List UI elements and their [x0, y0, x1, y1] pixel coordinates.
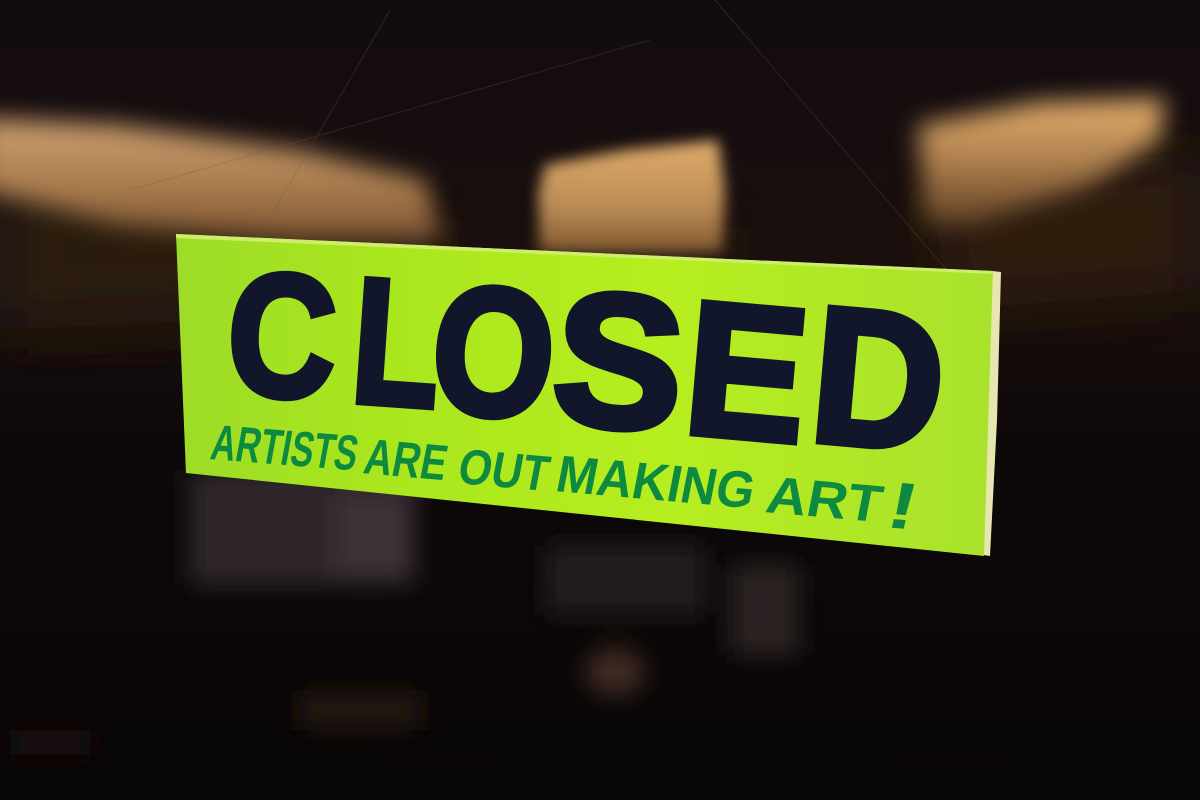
tagline: ARTISTS ARE OUT MAKING ART ! [207, 415, 925, 544]
ceiling light: right [918, 98, 1165, 225]
blurred posters below sign [10, 470, 800, 755]
tagline: ARTISTS ARE OUT MAKING ART !: OUT [454, 439, 555, 502]
sign board [176, 234, 993, 556]
tagline: ARTISTS ARE OUT MAKING ART !: ART [762, 467, 888, 534]
heading: CLOSED: L [346, 241, 447, 446]
heading: CLOSED: E [677, 261, 816, 483]
scratch lines on glass [130, 0, 945, 268]
sign board side edge [983, 271, 1001, 556]
tagline: ARTISTS ARE OUT MAKING ART !: ! [881, 469, 925, 544]
ceiling light: left [0, 118, 442, 240]
heading: CLOSED [223, 236, 953, 493]
tagline: ARTISTS ARE OUT MAKING ART !: ARE [360, 429, 452, 491]
heading: CLOSED: D [803, 265, 953, 493]
heading: CLOSED: C [223, 236, 341, 436]
heading: CLOSED: O [425, 245, 562, 458]
tagline: ARTISTS ARE OUT MAKING ART !: MAKING [552, 446, 760, 520]
ceiling light: centre [538, 140, 725, 252]
warm glow around ceiling lights [0, 150, 1200, 330]
heading: CLOSED: S [545, 249, 693, 473]
tagline: ARTISTS ARE OUT MAKING ART !: ARTISTS [207, 415, 363, 481]
